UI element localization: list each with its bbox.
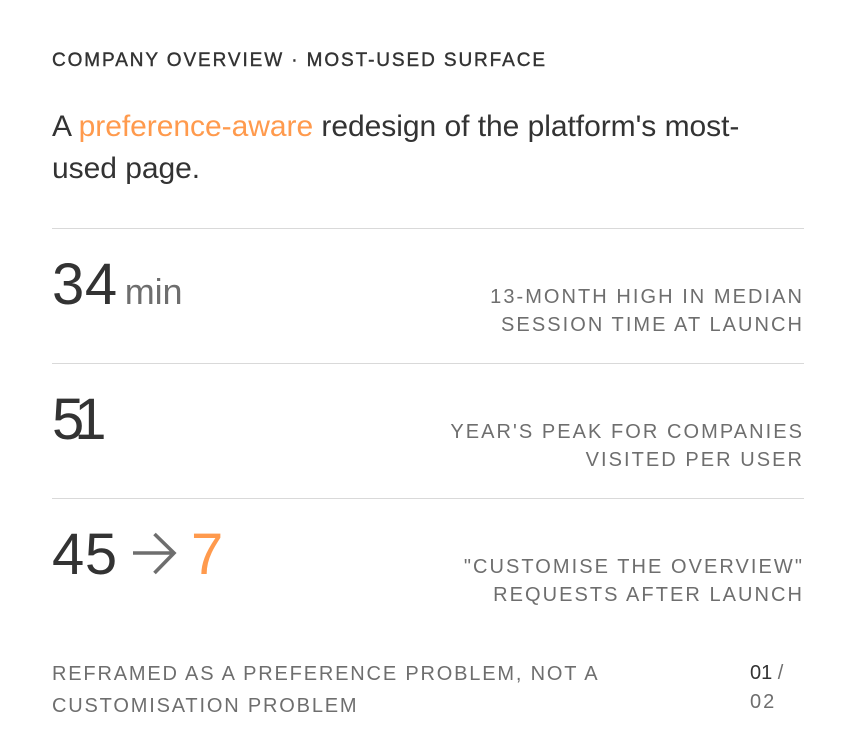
- page indicator: [750, 662, 784, 713]
- value: 45: 45: [52, 522, 118, 587]
- value: 45 to 7: [52, 522, 224, 587]
- page indicator: 02: [750, 691, 776, 713]
- metric: session time: [52, 252, 804, 336]
- value: 51: 51: [52, 387, 107, 452]
- label: companies visited: VISITED PER USER: [586, 449, 804, 471]
- label: customise requests: REQUESTS AFTER LAUNCH: [493, 584, 804, 606]
- icon: arrow: [133, 532, 176, 574]
- footer note: REFRAMED AS A PREFERENCE PROBLEM, NOT A: [52, 663, 599, 685]
- page indicator: 01 /: [750, 662, 783, 684]
- value: 7: 7: [191, 522, 224, 587]
- eyebrow heading: COMPANY OVERVIEW · MOST-USED SURFACE: [52, 50, 547, 71]
- metric: customise requests: [52, 522, 804, 606]
- footer note: CUSTOMISATION PROBLEM: [52, 695, 358, 717]
- label: session time: 13-MONTH HIGH IN MEDIAN: [490, 286, 804, 308]
- title: A preference-aware redesign of the platform's most-: [52, 110, 739, 143]
- title: used page.: [52, 152, 200, 185]
- label: companies visited: YEAR'S PEAK FOR COMPANIES: [450, 421, 804, 443]
- metric: companies visited: [52, 387, 804, 471]
- title: [52, 110, 739, 185]
- value: 34 min: 34min: [52, 252, 182, 317]
- label: customise requests: [464, 556, 804, 606]
- label: companies visited: [450, 421, 804, 471]
- footer note: [52, 663, 599, 717]
- label: session time: SESSION TIME AT LAUNCH: [501, 314, 804, 336]
- label: session time: [490, 286, 804, 336]
- label: customise requests: "CUSTOMISE THE OVERVIEW": [464, 556, 804, 578]
